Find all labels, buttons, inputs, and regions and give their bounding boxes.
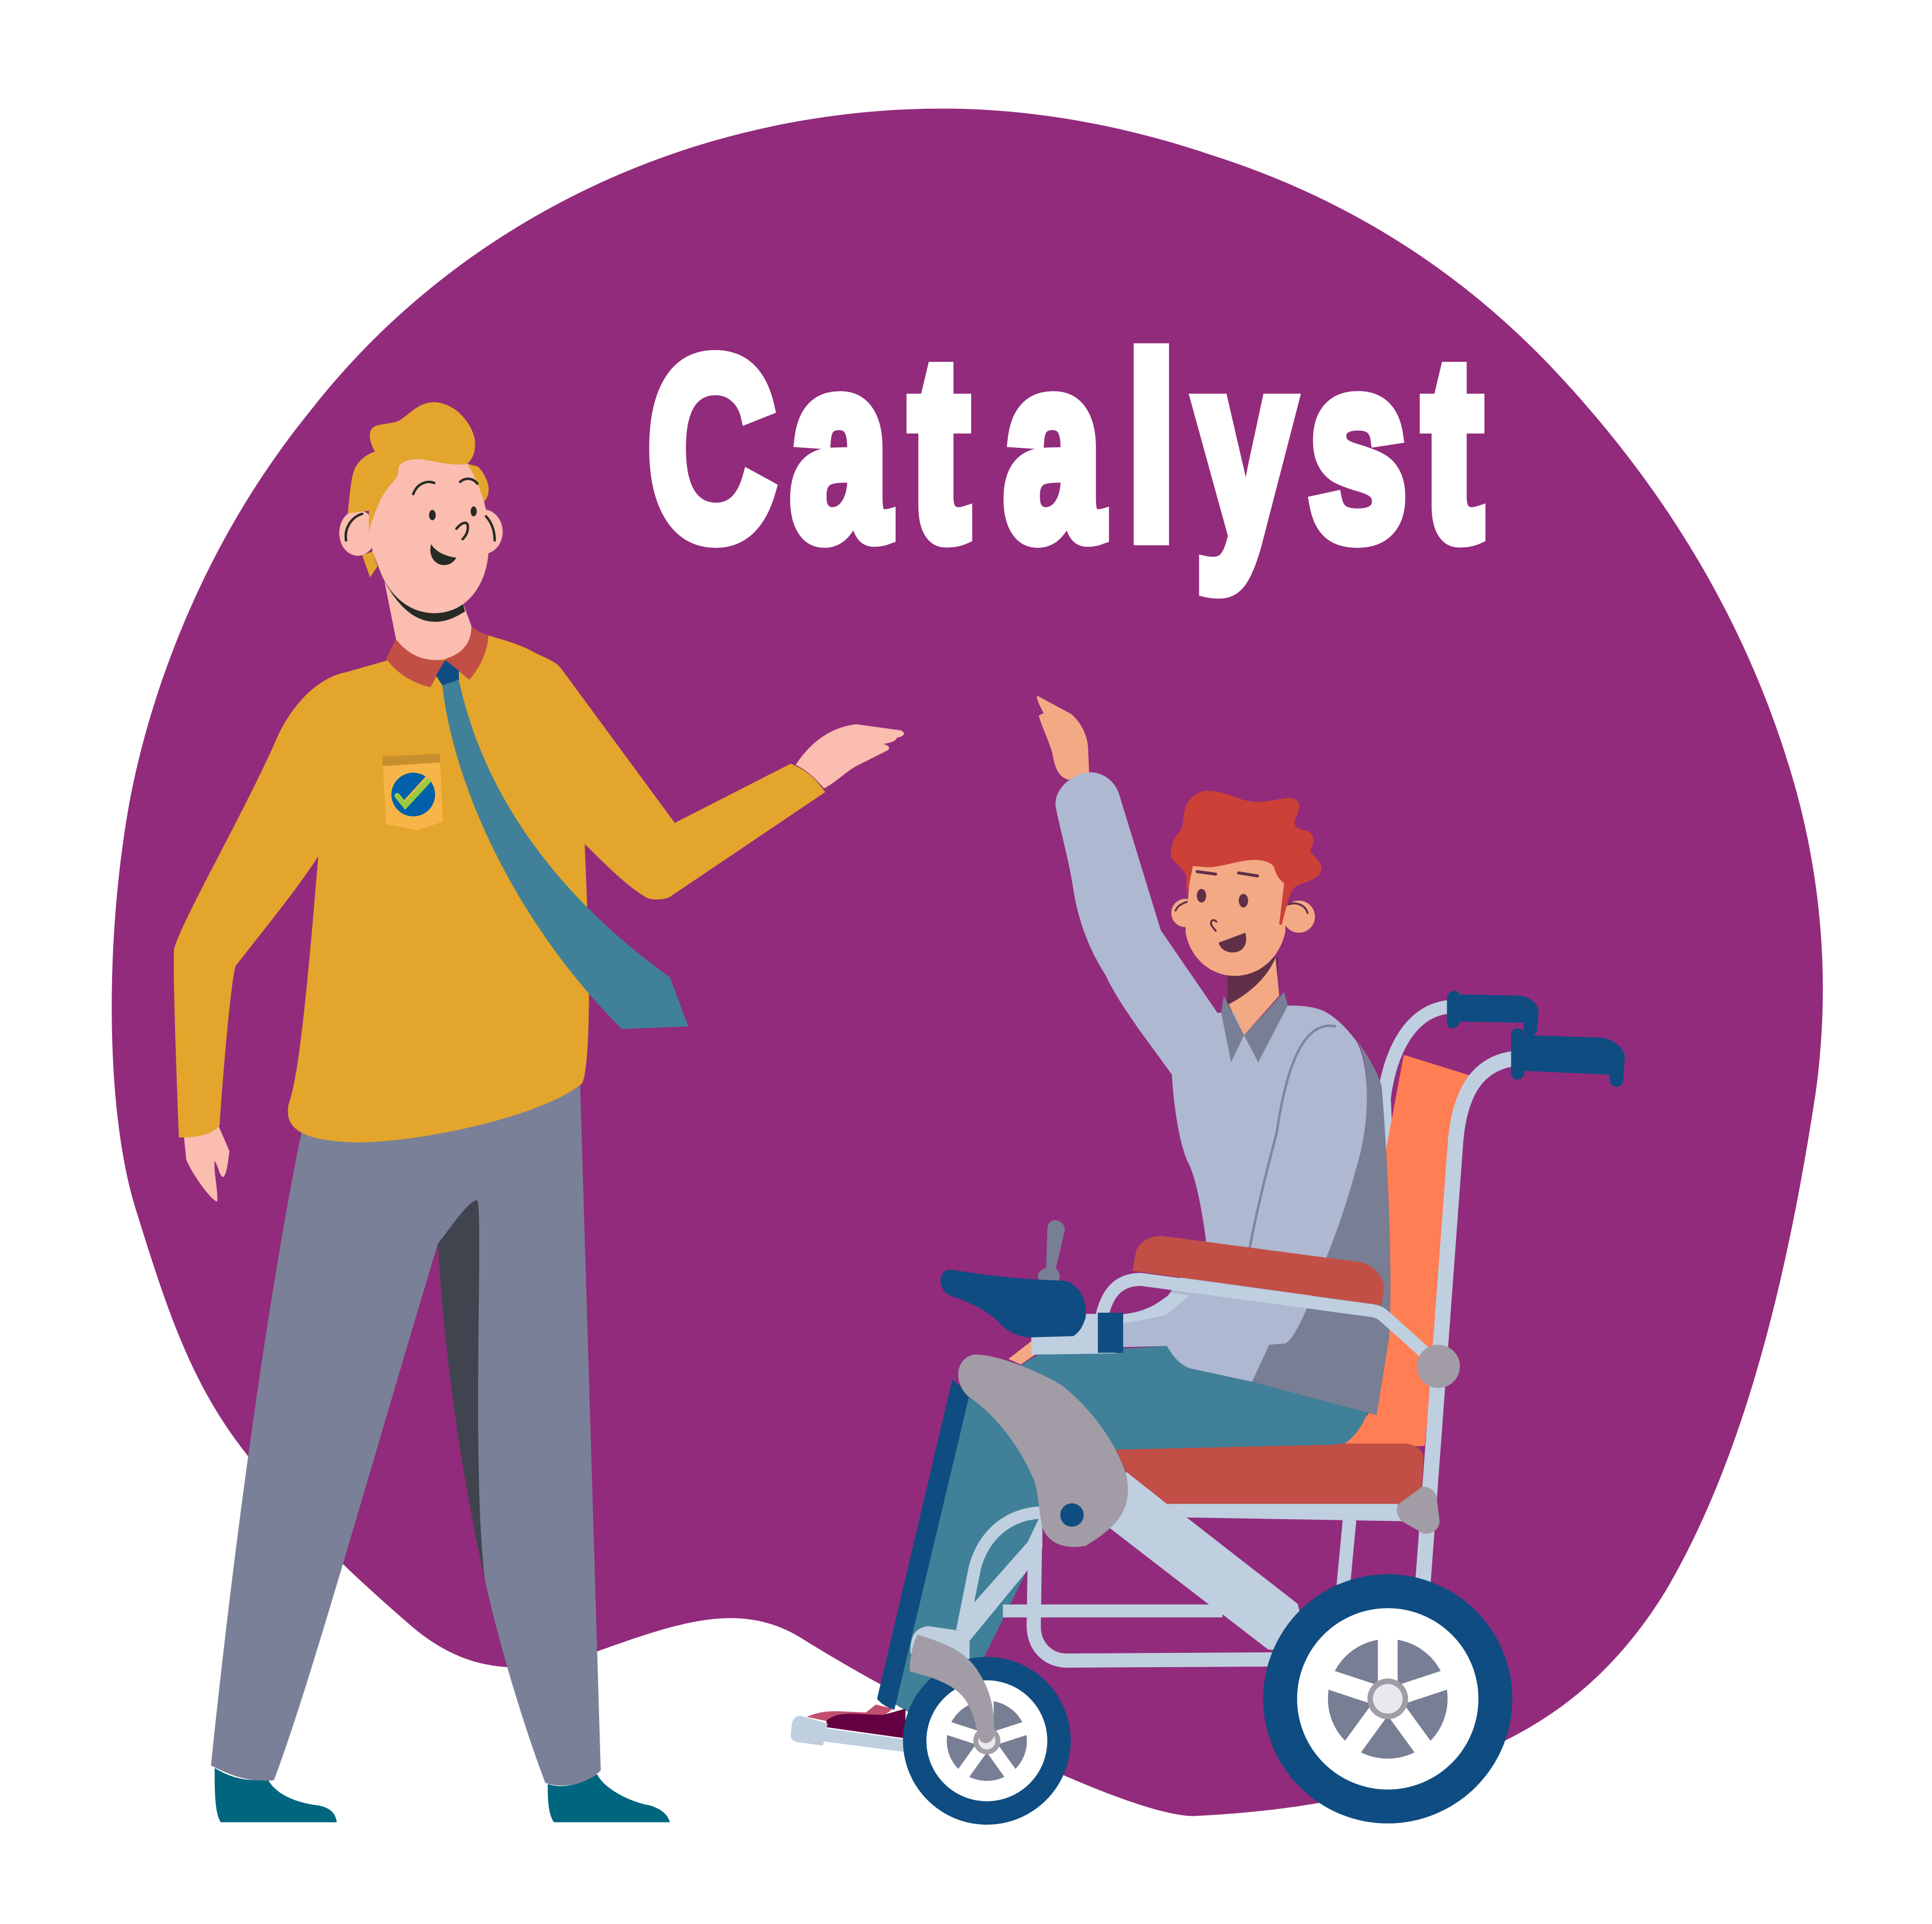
hair (348, 402, 475, 532)
shirt crease (1250, 1026, 1336, 1249)
red hair (1171, 791, 1321, 926)
face (369, 459, 489, 613)
seat cushion (1116, 1444, 1423, 1504)
armrest tube (1031, 1293, 1189, 1355)
shoe (807, 1705, 906, 1738)
armrest frame (1102, 1280, 1441, 1367)
horizontal tube (1003, 1604, 1222, 1618)
trousers (211, 1074, 601, 1785)
diagonal strut (1104, 1472, 1310, 1653)
orange backrest (1338, 1055, 1475, 1450)
forearm (1008, 1326, 1098, 1365)
trousers (894, 1346, 1368, 1715)
shoes (215, 1768, 670, 1822)
trouser shadow (438, 1201, 485, 1579)
face features (1176, 871, 1308, 953)
title: Catalyst (648, 305, 1482, 594)
lower loop (1034, 1542, 1283, 1661)
ears (339, 510, 502, 556)
side shirt shadow (1252, 1040, 1390, 1415)
lower shirt (1116, 1240, 1326, 1382)
shirt collar (1221, 992, 1288, 1063)
front diagonal (911, 1511, 1042, 1678)
armrest pad (1132, 1236, 1384, 1305)
navy square (1098, 1313, 1123, 1353)
back frame left arch (1384, 1007, 1451, 1160)
hair back (362, 464, 489, 578)
face features (346, 479, 495, 565)
knee pivot (1060, 1503, 1084, 1527)
right hand (796, 724, 904, 789)
collar (386, 626, 489, 687)
seat post (1343, 1520, 1349, 1585)
seat rail (1167, 1504, 1402, 1521)
neck (384, 578, 472, 660)
knee cover (958, 1355, 1128, 1547)
footplate (791, 1716, 907, 1752)
navy leg stripe (877, 1379, 970, 1710)
armrest pivot (1417, 1345, 1460, 1388)
raised hand (1037, 696, 1089, 780)
face (1185, 854, 1285, 976)
front caster fork (910, 1635, 994, 1743)
control box (940, 1270, 1086, 1338)
wheelchair user (791, 696, 1625, 1825)
neck shadow (1227, 958, 1278, 1024)
ears (1171, 899, 1315, 933)
joystick (1038, 1220, 1065, 1282)
front arch (962, 1513, 1040, 1631)
back frame right arch (1422, 1059, 1515, 1592)
sweater (174, 636, 825, 1143)
handle grips (1447, 991, 1625, 1087)
front wheel (903, 1657, 1071, 1825)
shirt body and arm (1056, 773, 1367, 1259)
background blob (112, 109, 1823, 1816)
tie knot (436, 660, 459, 685)
rear wheel (1263, 1574, 1512, 1823)
shirt hem over trousers (1252, 1345, 1381, 1415)
neck (1229, 958, 1279, 1035)
sash (442, 680, 689, 1029)
standing man (174, 402, 904, 1822)
pocket with badge (383, 754, 443, 831)
chin shadow (384, 580, 465, 622)
seat clamp (1397, 1487, 1439, 1534)
left hand (184, 1123, 230, 1202)
